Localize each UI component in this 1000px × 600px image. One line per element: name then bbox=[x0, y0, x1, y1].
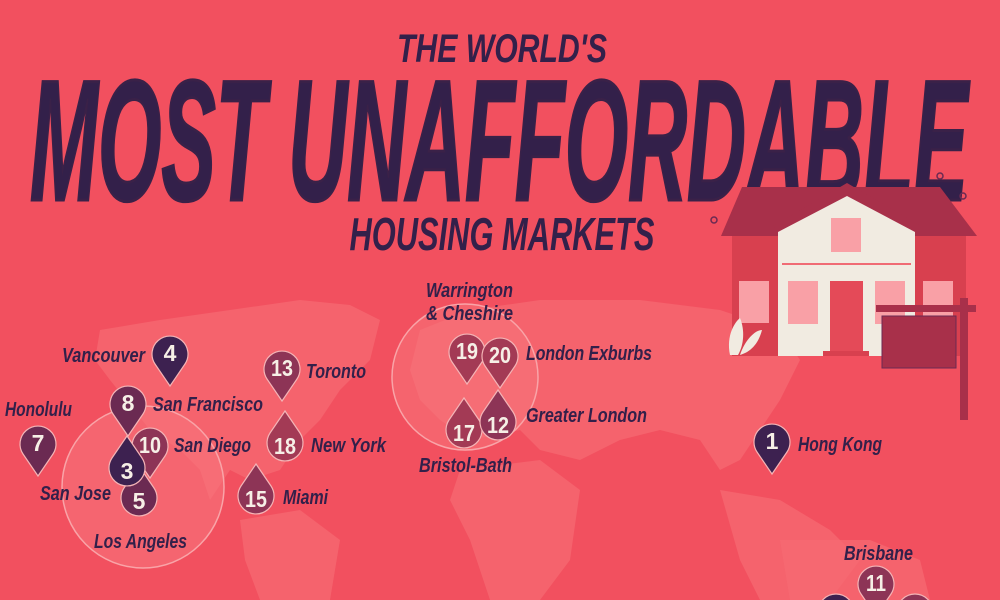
pin numbers: 1 bbox=[766, 428, 779, 454]
city labels: Warrington bbox=[426, 280, 513, 302]
pin numbers: 18 bbox=[274, 433, 296, 459]
pin numbers: 5 bbox=[133, 488, 146, 514]
pin numbers: 20 bbox=[489, 342, 511, 368]
title: THE WORLD'S bbox=[397, 27, 607, 71]
highlight circle: west coast bbox=[62, 406, 224, 568]
city labels: San Jose bbox=[40, 483, 111, 505]
pin numbers bbox=[32, 338, 886, 596]
pin numbers: 4 bbox=[164, 340, 177, 366]
city labels: Bristol-Bath bbox=[419, 455, 512, 477]
city labels: Brisbane bbox=[844, 543, 913, 565]
pin numbers: 19 bbox=[456, 338, 478, 364]
city labels bbox=[5, 280, 913, 565]
pin numbers: 10 bbox=[139, 432, 161, 458]
city labels: Vancouver bbox=[62, 345, 146, 367]
pin numbers: 17 bbox=[453, 420, 475, 446]
pin numbers: 7 bbox=[32, 430, 44, 456]
pin numbers: 11 bbox=[866, 570, 886, 596]
pin numbers: 15 bbox=[245, 486, 267, 512]
pin numbers: 13 bbox=[271, 355, 293, 381]
city labels: Hong Kong bbox=[798, 434, 882, 456]
pin numbers: 8 bbox=[122, 390, 135, 416]
pin numbers: 12 bbox=[487, 412, 509, 438]
icon: house with for-sale sign bbox=[711, 173, 977, 420]
city labels: Greater London bbox=[526, 405, 647, 427]
world map land bbox=[95, 300, 930, 600]
city labels: Los Angeles bbox=[94, 531, 187, 553]
city labels: Toronto bbox=[306, 361, 366, 383]
pin numbers: 3 bbox=[121, 458, 133, 484]
pins bbox=[20, 334, 933, 600]
city labels: Miami bbox=[283, 487, 328, 509]
city labels: Honolulu bbox=[5, 399, 72, 421]
city labels: London Exburbs bbox=[526, 343, 652, 365]
title: HOUSING MARKETS bbox=[350, 208, 655, 260]
city labels: San Francisco bbox=[153, 394, 263, 416]
city labels: San Diego bbox=[174, 435, 251, 457]
city labels: & Cheshire bbox=[426, 303, 513, 325]
highlight circle: UK bbox=[392, 304, 538, 450]
city labels: New York bbox=[311, 435, 387, 457]
